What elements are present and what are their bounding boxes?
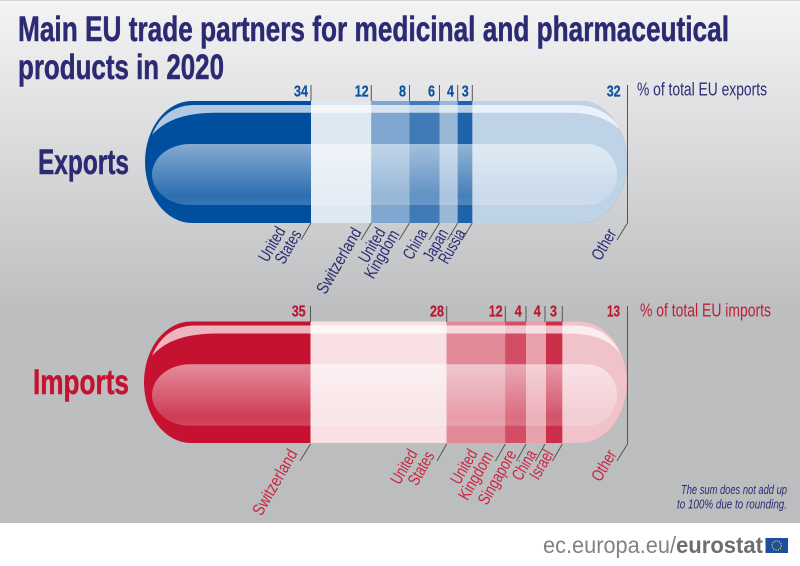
footer: source url: ec.europa.eu/: [543, 532, 677, 558]
imports partner labels: Singapore: [474, 446, 520, 508]
imports values: 28: [430, 304, 444, 320]
imports values: 12: [489, 304, 503, 320]
exports values: 34: [294, 84, 308, 100]
exports partner labels: China: [399, 225, 432, 263]
footer: source url: eurostat: [676, 532, 763, 558]
exports partner labels: Kingdom: [361, 226, 403, 282]
exports partner labels: United: [355, 224, 389, 266]
exports values: 4: [447, 84, 454, 100]
exports partner labels: Switzerland: [313, 224, 365, 297]
exports partner labels: Japan: [419, 226, 452, 264]
exports values: 12: [355, 84, 369, 100]
heading: exports: Exports: [38, 143, 129, 182]
exports values: 3: [462, 84, 469, 100]
exports partner labels: Russia: [435, 225, 470, 267]
imports partner labels: United: [447, 446, 481, 488]
imports values: 13: [607, 304, 620, 320]
icon: EU flag: [766, 538, 788, 553]
exports values: 8: [399, 84, 406, 100]
imports partner labels: Switzerland: [249, 446, 301, 519]
exports values: 6: [428, 84, 435, 100]
exports value ticks: [301, 85, 628, 240]
imports values: 3: [550, 304, 557, 320]
imports partner labels: States: [404, 448, 438, 489]
imports value ticks: [300, 306, 628, 461]
imports partner labels: United: [387, 446, 421, 488]
imports partner labels: Israel: [526, 446, 557, 483]
exports values: [294, 84, 621, 100]
imports values: 4: [515, 304, 522, 320]
imports values: 35: [292, 304, 306, 320]
imports partner labels: Kingdom: [455, 448, 497, 503]
title: products in 2020: [18, 48, 224, 87]
imports partner labels: [249, 446, 621, 519]
footer: source url: [543, 532, 763, 558]
imports partner labels: China: [508, 446, 541, 484]
exports values: 32: [607, 84, 621, 100]
exports partner labels: United: [255, 224, 289, 265]
exports partner labels: [255, 224, 621, 297]
capsule chart: imports: [144, 321, 627, 444]
imports partner labels: Other: [588, 446, 621, 485]
imports values: 4: [534, 304, 541, 320]
imports values: [292, 304, 620, 320]
footnote: [677, 482, 787, 512]
heading: imports: Imports: [33, 363, 129, 402]
exports partner labels: States: [271, 226, 305, 267]
exports partner labels: Other: [588, 225, 621, 264]
title: [18, 10, 729, 87]
capsule chart: exports: [145, 101, 627, 223]
